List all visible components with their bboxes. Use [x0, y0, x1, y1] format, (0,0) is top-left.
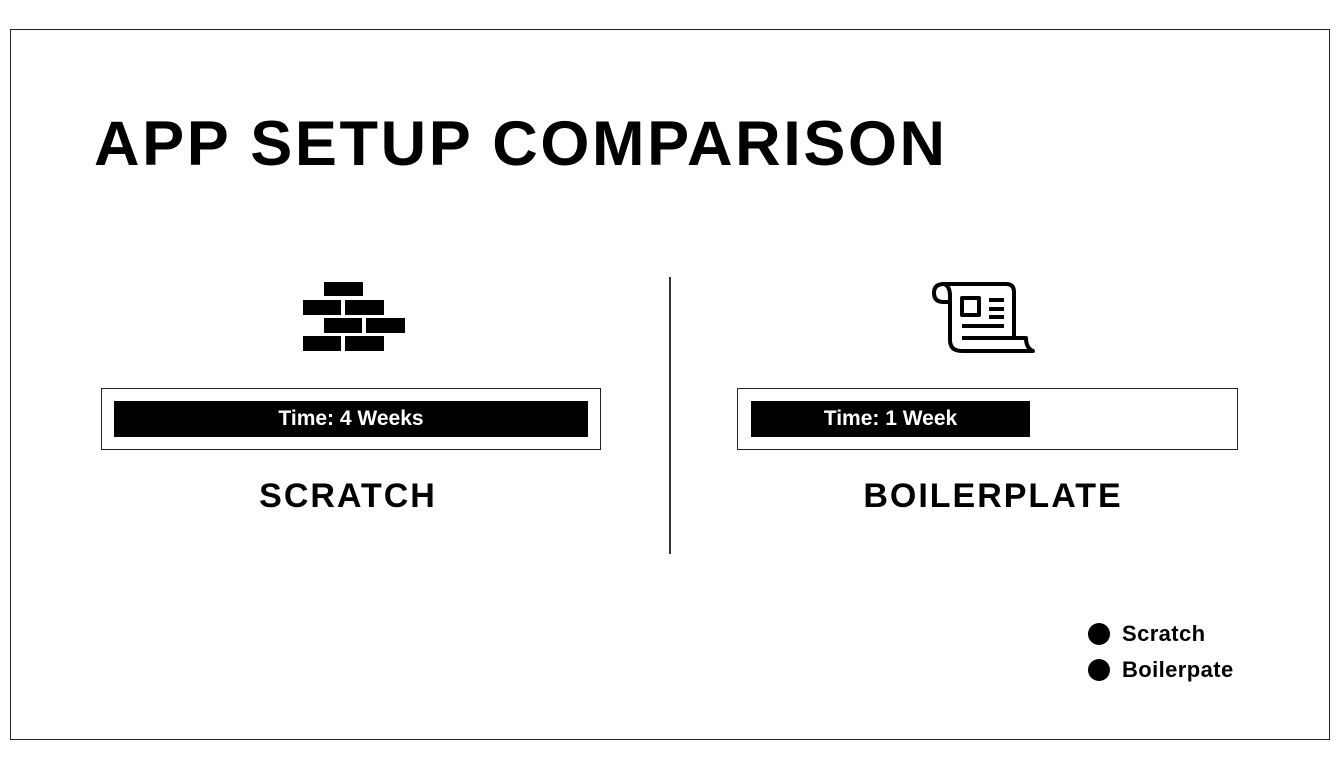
- legend: [1088, 621, 1234, 682]
- legend: boilerplate: Boilerpate: [1122, 657, 1234, 682]
- panel: boilerplate bar: [737, 388, 1238, 450]
- panel: scratch bar: [101, 388, 601, 450]
- label: scratch: SCRATCH: [259, 477, 437, 515]
- title: APP SETUP COMPARISON: [94, 109, 948, 179]
- bar: 4 weeks: [114, 401, 588, 437]
- divider: [669, 277, 670, 554]
- icon: bricks: [303, 282, 405, 351]
- bar: 1 week: Time: 1 Week: [824, 407, 957, 430]
- bar: 4 weeks: Time: 4 Weeks: [278, 407, 424, 430]
- bar: 1 week: [751, 401, 1030, 437]
- legend: scratch: Scratch: [1122, 621, 1206, 646]
- icon: boilerplate scroll: [932, 282, 1035, 353]
- label: boilerplate: BOILERPLATE: [863, 477, 1123, 515]
